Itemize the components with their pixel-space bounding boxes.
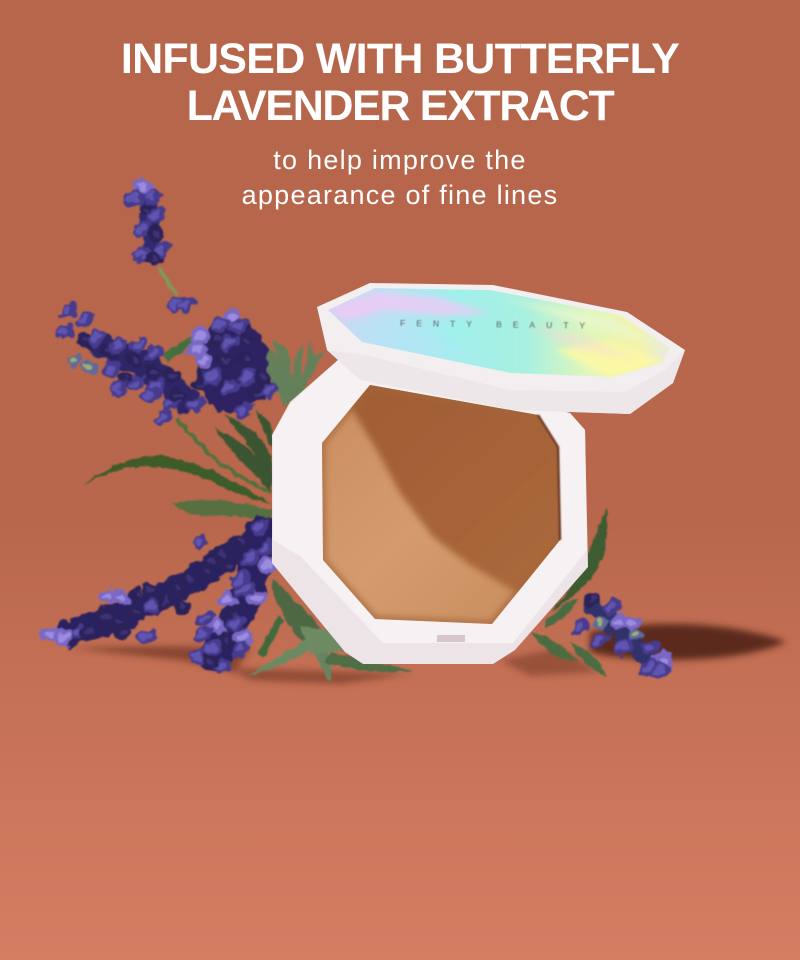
shadows [70,624,786,684]
lavender lower right cluster [568,590,675,681]
compact base [272,360,590,664]
title [121,35,680,130]
rosemary leaves behind compact [253,333,325,406]
compact lid [317,283,685,414]
subtitle: to help improve the [273,145,527,175]
hinge clasp [437,635,465,642]
title: INFUSED WITH BUTTERFLY [121,35,679,83]
lavender stems and leaves [83,268,607,682]
stem upper [158,268,177,295]
long leaf [83,455,272,505]
powder pan [322,385,560,624]
product illustration [38,175,787,687]
subtitle [242,145,558,210]
inner top face [273,360,587,643]
holographic panel [328,288,670,378]
lavender top spike [123,175,199,316]
right leaf [552,508,607,612]
lower sprig [272,578,330,645]
lavender lower left cluster [38,516,280,678]
brand wordmark: FENTY BEAUTY [400,318,596,331]
title: LAVENDER EXTRACT [187,82,613,130]
lavender upper cluster [53,299,282,428]
subtitle: appearance of fine lines [242,180,558,210]
lower leaf [172,500,272,520]
pan right edge shadow [538,415,560,540]
